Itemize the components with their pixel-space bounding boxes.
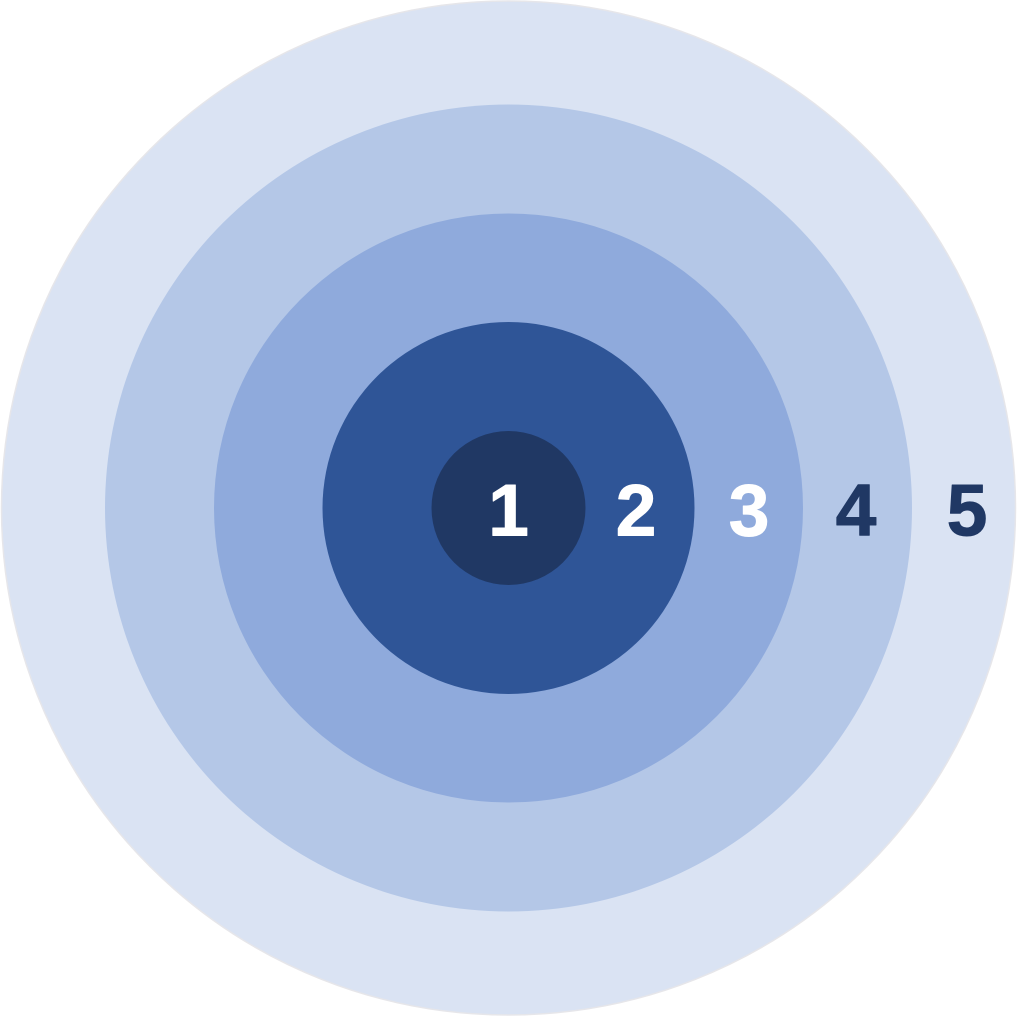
label 4: 4 — [836, 470, 877, 552]
label 1: 1 — [488, 470, 529, 552]
label 2: 2 — [616, 470, 656, 552]
label 3: 3 — [729, 470, 769, 552]
label 5: 5 — [947, 470, 987, 552]
ring 4 — [105, 104, 912, 912]
ring 2 — [322, 322, 694, 694]
ring 1: centre circle — [432, 431, 586, 585]
ring 3 — [214, 214, 803, 802]
